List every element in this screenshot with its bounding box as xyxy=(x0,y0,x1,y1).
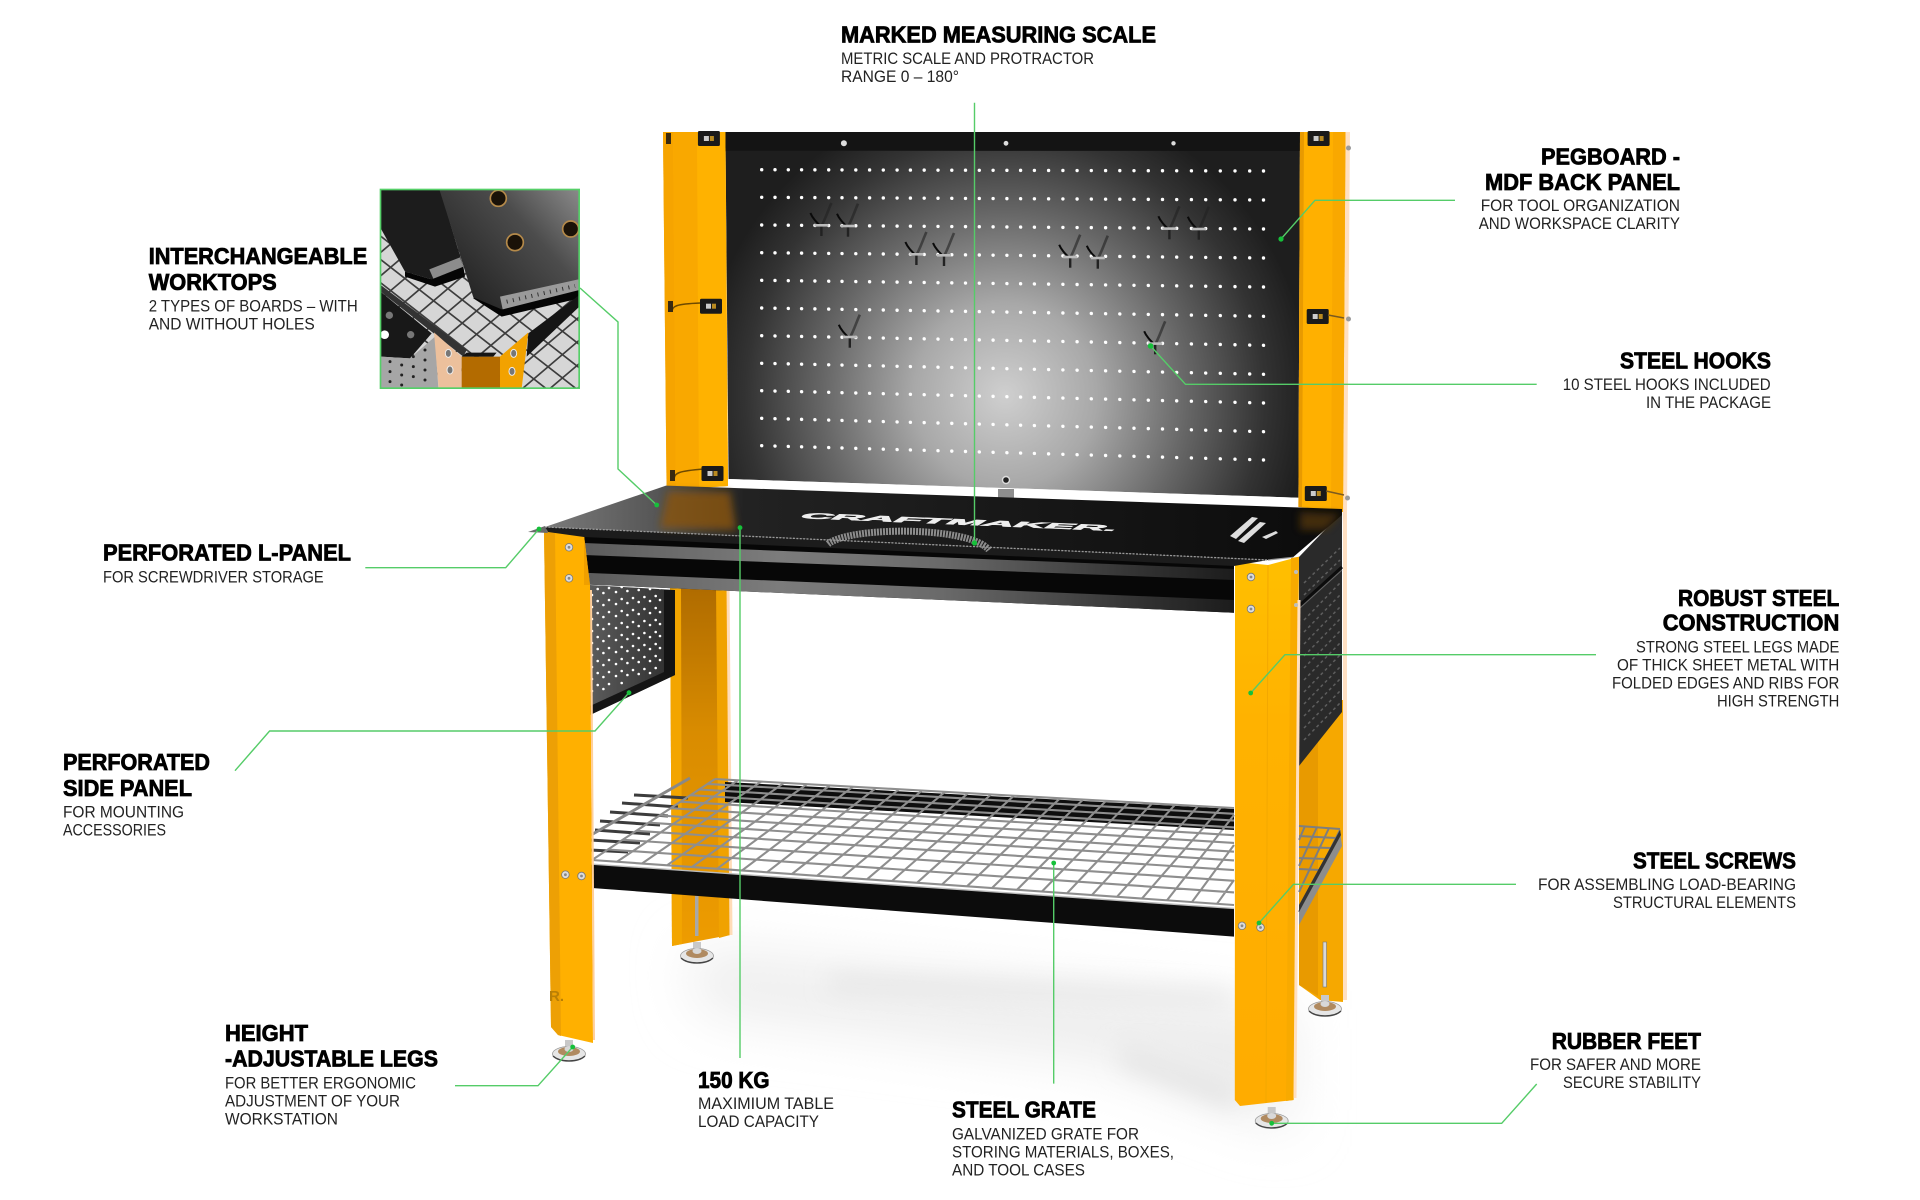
callout: robust steel construction: FOLDED EDGES AND RIBS FOR xyxy=(1612,674,1839,692)
pegboard screws xyxy=(841,140,1176,146)
callout: steel hooks xyxy=(1148,343,1771,412)
front edge scale xyxy=(545,527,1268,560)
callout: pegboard: AND WORKSPACE CLARITY xyxy=(1479,215,1680,233)
brand name on worktop: CRAFTMAKER. xyxy=(795,511,1125,533)
floor shadow xyxy=(690,950,1290,1130)
left mesh end xyxy=(590,795,688,852)
callout: robust steel construction: ROBUST STEEL xyxy=(1678,585,1839,611)
leg lettering: R. xyxy=(549,988,564,1005)
callout: interchangeable worktops: INTERCHANGEABLE xyxy=(149,243,367,269)
callout: perforated side panel: ACCESSORIES xyxy=(63,821,166,839)
rear black bar xyxy=(725,782,1234,830)
pegboard surface xyxy=(725,132,1300,498)
icon: rear feet xyxy=(680,942,1342,1016)
callout: marked measuring scale: RANGE 0 – 180° xyxy=(841,68,959,86)
front left leg xyxy=(544,531,594,1043)
left upright xyxy=(663,131,728,490)
callout: marked measuring scale: MARKED MEASURING SCALE xyxy=(841,21,1156,47)
worktop corner mark xyxy=(1230,517,1278,543)
white gap under pegboard xyxy=(729,479,1298,507)
inset board holes xyxy=(490,190,579,251)
callout: perforated side panel xyxy=(63,690,631,839)
callout: robust steel construction xyxy=(1248,585,1839,710)
callout: pegboard xyxy=(1278,144,1680,242)
callout: interchangeable worktops xyxy=(149,243,659,507)
worktop surface xyxy=(528,486,1342,566)
lower rail xyxy=(584,573,1234,613)
callout: 150 kg: LOAD CAPACITY xyxy=(698,1113,819,1131)
front edge band xyxy=(545,527,1268,566)
callout: 150 kg xyxy=(698,525,834,1131)
callout: height-adjustable legs: ADJUSTMENT OF YOUR xyxy=(225,1092,400,1110)
callout: rubber feet: SECURE STABILITY xyxy=(1563,1074,1701,1092)
callout: perforated side panel: PERFORATED xyxy=(63,749,210,775)
worktop underside and rails xyxy=(584,529,1234,613)
callout: rubber feet xyxy=(1269,1028,1702,1126)
callout: steel hooks: 10 STEEL HOOKS INCLUDED xyxy=(1563,376,1771,394)
inset orange leg corner xyxy=(434,332,462,388)
callout: pegboard: PEGBOARD - xyxy=(1541,144,1680,170)
protractor xyxy=(828,531,989,550)
callout: robust steel construction: OF THICK SHEET METAL WITH xyxy=(1617,656,1839,674)
callout: height-adjustable legs: WORKSTATION xyxy=(225,1110,338,1128)
callout: marked measuring scale xyxy=(841,21,1156,546)
callout: perforated side panel: FOR MOUNTING xyxy=(63,803,184,821)
callout: marked measuring scale: METRIC SCALE AND PROTRACTOR xyxy=(841,50,1094,68)
callout: steel grate: GALVANIZED GRATE FOR xyxy=(952,1126,1139,1144)
callout: steel grate: STORING MATERIALS, BOXES, xyxy=(952,1144,1174,1162)
shelf front rail xyxy=(587,864,1234,937)
callout: rubber feet: FOR SAFER AND MORE xyxy=(1530,1056,1701,1074)
upper rail xyxy=(584,543,1234,580)
callout: robust steel construction: CONSTRUCTION xyxy=(1663,610,1839,636)
callout: steel screws: STEEL SCREWS xyxy=(1633,847,1796,873)
pegboard top band xyxy=(725,132,1300,151)
callout: height-adjustable legs: HEIGHT xyxy=(225,1020,309,1046)
callout: height-adjustable legs xyxy=(225,1020,575,1128)
callout: steel screws xyxy=(1257,847,1796,925)
callout: steel grate xyxy=(952,861,1174,1180)
panel: pegboard back panel xyxy=(725,132,1300,507)
perforated side panel xyxy=(590,584,675,715)
front right leg xyxy=(1235,557,1299,1106)
callout: perforated l-panel: FOR SCREWDRIVER STORAGE xyxy=(103,569,324,587)
inset perforated panel xyxy=(381,337,438,388)
callout: perforated side panel: SIDE PANEL xyxy=(63,775,192,801)
upright reflections xyxy=(660,491,736,530)
grate: steel shelf xyxy=(587,778,1342,937)
callout: steel grate: AND TOOL CASES xyxy=(952,1162,1085,1180)
callout: steel screws: STRUCTURAL ELEMENTS xyxy=(1613,894,1796,912)
right upright xyxy=(1298,131,1351,512)
inset rail and corner xyxy=(381,285,467,357)
callout: steel hooks: STEEL HOOKS xyxy=(1620,348,1771,374)
callout: steel grate: STEEL GRATE xyxy=(952,1096,1096,1122)
callout: 150 kg: MAXIMIUM TABLE xyxy=(698,1095,834,1113)
callout: 150 kg: 150 KG xyxy=(698,1067,770,1093)
callout: interchangeable worktops: 2 TYPES OF BOARDS – WITH xyxy=(149,298,358,316)
right side panel xyxy=(1299,512,1342,766)
callout: steel hooks: IN THE PACKAGE xyxy=(1646,394,1771,412)
rear left leg xyxy=(670,585,731,946)
callout: rubber feet: RUBBER FEET xyxy=(1552,1028,1702,1054)
rear right leg xyxy=(1299,510,1345,1002)
callout: perforated l-panel: PERFORATED L-PANEL xyxy=(103,540,351,566)
icon: front feet xyxy=(552,1040,1288,1128)
right mesh extension xyxy=(1299,826,1340,912)
callout: interchangeable worktops: WORKTOPS xyxy=(149,269,277,295)
pegboard perforation grid xyxy=(760,168,1265,462)
callout: height-adjustable legs: FOR BETTER ERGONOMIC xyxy=(225,1074,416,1092)
callout: height-adjustable legs: -ADJUSTABLE LEGS xyxy=(225,1046,438,1072)
callout: pegboard: MDF BACK PANEL xyxy=(1485,169,1680,195)
icon: steel hooks xyxy=(810,203,1209,354)
wire mesh xyxy=(592,779,1234,905)
callout: robust steel construction: STRONG STEEL LEGS MADE xyxy=(1636,638,1839,656)
callout: perforated l-panel xyxy=(103,527,541,587)
inset: interchangeable worktops xyxy=(380,188,580,389)
callout: steel screws: FOR ASSEMBLING LOAD-BEARING xyxy=(1538,876,1796,894)
callout: pegboard: FOR TOOL ORGANIZATION xyxy=(1481,197,1680,215)
callout: robust steel construction: HIGH STRENGTH xyxy=(1717,692,1839,710)
inset front board xyxy=(473,290,578,317)
callout: interchangeable worktops: AND WITHOUT HOLES xyxy=(149,316,315,334)
centre bracket xyxy=(998,476,1014,501)
inset rear board xyxy=(381,189,463,279)
